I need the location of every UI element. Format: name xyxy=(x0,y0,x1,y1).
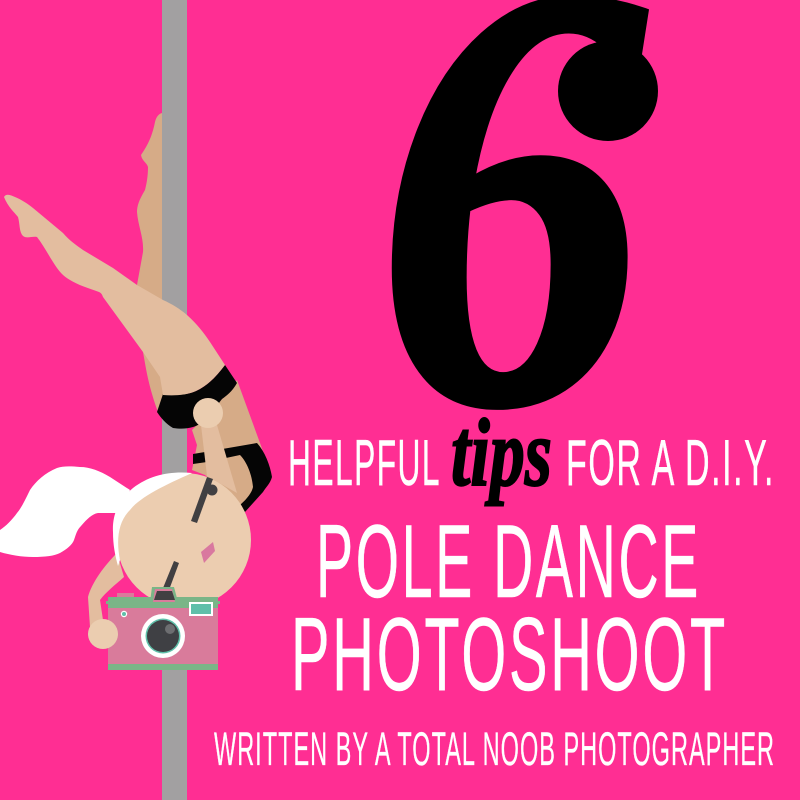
illustration: pole dancer xyxy=(0,113,272,670)
numeral ball terminal xyxy=(558,41,658,141)
lens xyxy=(141,614,185,658)
camera xyxy=(106,587,220,670)
hair xyxy=(113,473,192,566)
flash window xyxy=(190,603,212,615)
camera top band xyxy=(106,597,220,608)
glasses lower bar xyxy=(163,561,179,590)
camera body xyxy=(108,597,218,670)
bikini bottom xyxy=(157,365,237,429)
camera bottom band xyxy=(108,664,218,670)
script word: tips: tips xyxy=(451,399,552,506)
glasses upper bar xyxy=(191,477,213,523)
head xyxy=(117,473,251,607)
bikini top xyxy=(193,443,272,512)
front leg xyxy=(4,195,225,395)
ponytail xyxy=(0,466,130,557)
torso xyxy=(192,380,272,512)
raised arm xyxy=(201,425,237,493)
glasses lens xyxy=(206,484,218,496)
pole xyxy=(162,0,187,800)
viewfinder xyxy=(150,587,178,602)
indicator dot xyxy=(121,611,127,617)
lips xyxy=(201,542,215,563)
shutter button xyxy=(117,593,134,598)
back leg xyxy=(137,113,180,412)
hand on camera xyxy=(88,619,118,649)
lower arm xyxy=(88,553,124,627)
hand on pole xyxy=(193,398,223,428)
text: HELPFUL xyxy=(288,426,441,499)
